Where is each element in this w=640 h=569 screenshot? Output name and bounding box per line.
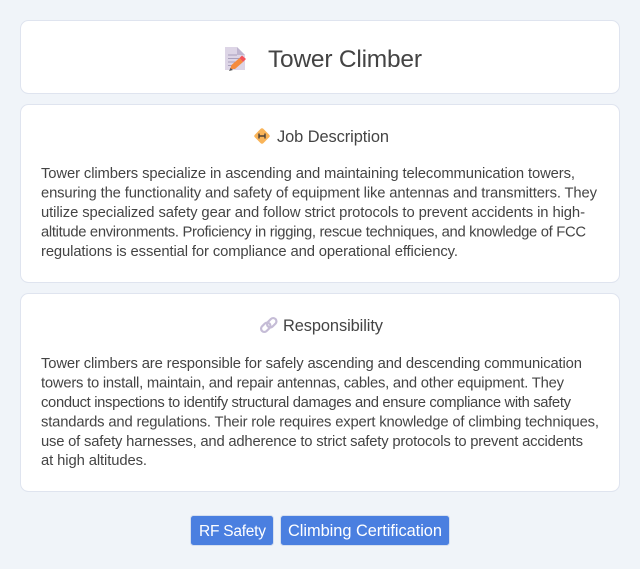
icon: document with pencil — [225, 47, 246, 71]
text block: job description: utilize specialized safety gear and follow strict protocols to prevent accidents in high- — [41, 205, 585, 221]
text block: responsibility: Tower climbers are responsible for safely ascending and descending communication — [41, 356, 582, 372]
text block: responsibility: standards and regulations. Their role requires expert knowledge of climbing techniques, — [41, 414, 599, 430]
text block: responsibility: at high altitudes. — [41, 453, 147, 469]
text block: job description: ensuring the functionality and safety of equipment like antennas and transmitters. They — [41, 186, 598, 202]
tag: Climbing Certification: Climbing Certification — [288, 522, 442, 540]
tag: RF Safety — [190, 516, 274, 546]
text block: responsibility — [41, 356, 599, 469]
panel: responsibility — [20, 294, 620, 492]
icon: diamond sign — [254, 128, 270, 144]
tag: Climbing Certification — [280, 516, 450, 546]
panel: title — [20, 20, 620, 94]
text block: job description — [41, 166, 598, 260]
panel: job description — [20, 104, 620, 282]
tag: RF Safety: RF Safety — [199, 523, 266, 540]
heading: job description: Job Description — [277, 128, 389, 146]
icon: chain link — [260, 317, 278, 333]
text block: responsibility: use of safety harnesses, and adherence to strict safety protocols to prevent accidents — [41, 434, 583, 450]
text block: job description: regulations is essential for compliance and operational efficiency. — [41, 244, 458, 260]
heading: responsibility: Responsibility — [283, 317, 384, 335]
text block: job description: altitude environments. Proficiency in rigging, rescue techniques, and knowledge of FCC — [41, 224, 586, 240]
text block: job description: Tower climbers specialize in ascending and maintaining telecommunication towers, — [41, 166, 575, 182]
text block: responsibility: conduct inspections to identify structural damages and ensure compliance with safety — [41, 395, 572, 411]
title text: Tower Climber — [268, 46, 422, 73]
text block: responsibility: towers to install, maintain, and repair antennas, cables, and other equipment. They — [41, 376, 565, 392]
